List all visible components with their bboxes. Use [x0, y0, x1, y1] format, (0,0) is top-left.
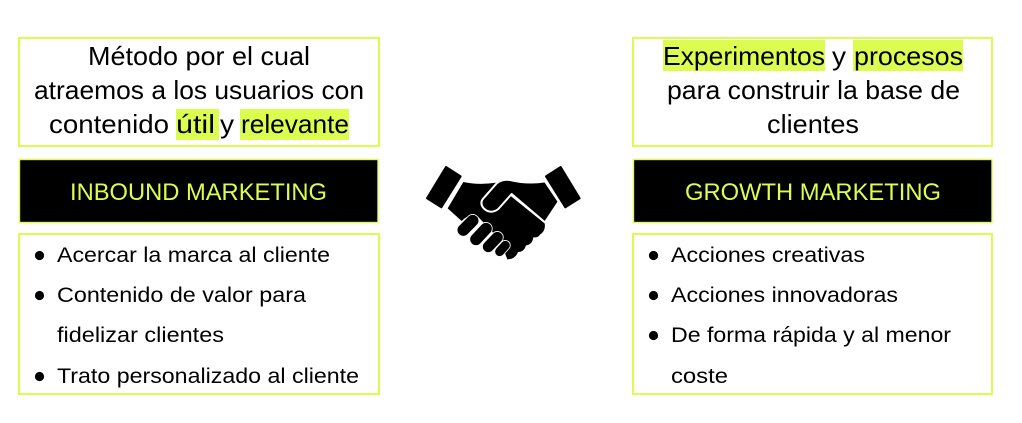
inbound bullet list: Contenido de valor para — [57, 283, 306, 307]
growth bullet list: coste — [671, 364, 728, 388]
growth bullet list: Acciones innovadoras — [671, 283, 898, 307]
inbound definition box — [19, 38, 379, 146]
growth marketing heading — [634, 160, 992, 222]
icon: handshake — [427, 167, 580, 259]
growth bullet list: Acciones creativas — [671, 243, 865, 267]
inbound definition box: y — [220, 109, 234, 139]
inbound bullet list — [19, 234, 379, 394]
growth definition box: y — [832, 41, 846, 71]
inbound definition box: relevante — [241, 109, 349, 139]
growth bullet list: De forma rápida y al menor — [671, 323, 951, 347]
panel: inbound marketing — [19, 38, 379, 394]
growth definition box: para construir la base de — [667, 75, 960, 105]
inbound marketing heading — [20, 160, 378, 222]
inbound marketing heading: INBOUND MARKETING — [70, 179, 327, 206]
growth definition box — [633, 38, 992, 146]
inbound definition box: contenido — [49, 109, 169, 139]
inbound bullet list: Acercar la marca al cliente — [57, 243, 330, 267]
growth definition box: Experimentos — [663, 41, 825, 71]
inbound definition box: atraemos a los usuarios con — [34, 75, 364, 105]
inbound bullet list: Trato personalizado al cliente — [57, 364, 359, 388]
growth bullet list — [633, 234, 992, 394]
growth definition box: clientes — [767, 109, 859, 139]
inbound definition box: Método por el cual — [88, 41, 310, 71]
inbound bullet list: fidelizar clientes — [57, 323, 224, 347]
growth definition box: procesos — [854, 41, 963, 71]
panel: growth marketing — [633, 38, 992, 394]
inbound definition box: útil — [176, 109, 215, 139]
growth marketing heading: GROWTH MARKETING — [685, 179, 941, 206]
